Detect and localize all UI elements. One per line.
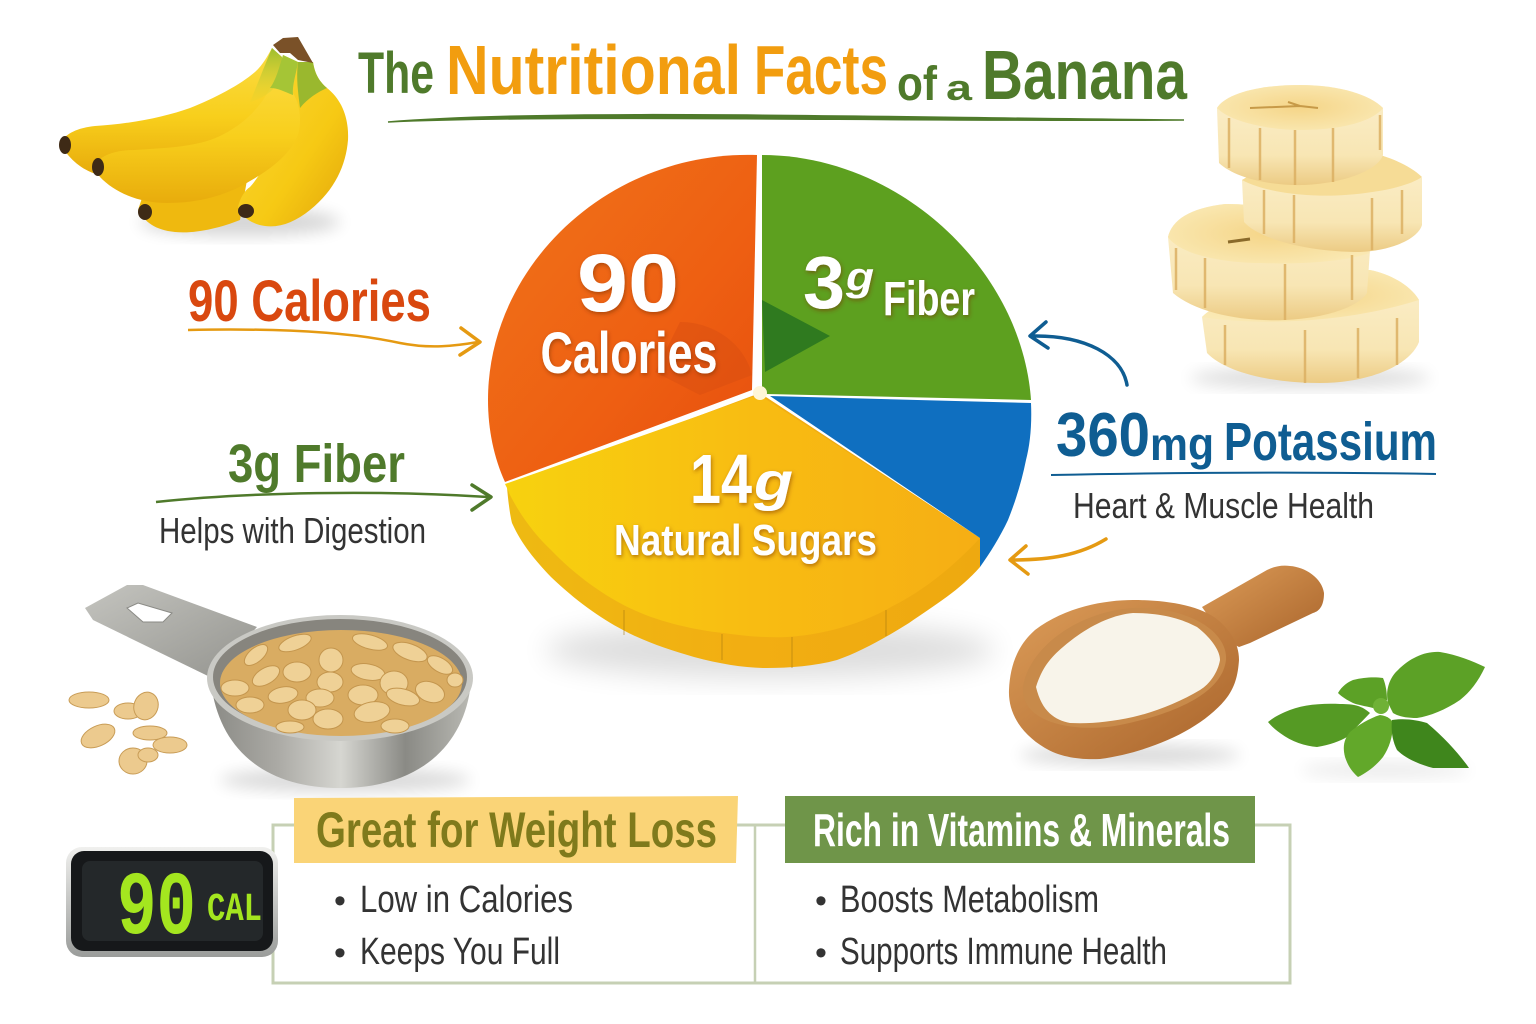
heading: great for weight loss <box>294 796 738 863</box>
chart label: 90 calories: Calories <box>540 321 718 386</box>
chart slice: yellow natural sugars <box>505 393 980 668</box>
heading: rich in vitamins and minerals <box>785 796 1255 863</box>
panel: benefits box <box>273 796 1290 983</box>
chart label: 3g fiber: g <box>845 255 874 299</box>
arrow: to fiber slice <box>1030 322 1127 385</box>
callout: 3g fiber: 3g Fiber <box>228 434 405 494</box>
icon: measuring cup of oats <box>69 585 473 792</box>
pie chart <box>488 155 1031 678</box>
title: of <box>897 58 938 111</box>
chart label: 14g natural sugars <box>614 440 877 565</box>
arrow: to blue slice <box>1010 539 1106 574</box>
heading: rich in vitamins and minerals: Rich in Vitamins & Minerals <box>813 804 1230 856</box>
chart label: 3g fiber: 3 <box>803 241 845 324</box>
callout: 360mg potassium: 360 <box>1056 401 1150 470</box>
text block: weight loss bullets: Keeps You Full <box>360 931 560 973</box>
heading: great for weight loss: Great for Weight Loss <box>316 802 717 858</box>
chart label: 3g fiber <box>803 241 975 326</box>
text block: weight loss bullets: • <box>334 882 346 920</box>
chart slice: orange calories <box>488 155 757 482</box>
icon: green leaves <box>1268 652 1485 778</box>
chart slice: blue potassium <box>770 396 1031 567</box>
title <box>358 31 1188 122</box>
icon: banana bunch <box>59 37 348 236</box>
title: Banana <box>982 36 1188 114</box>
arrow: to sugars slice <box>472 485 491 510</box>
icon: stacked banana slices <box>1168 85 1430 388</box>
chart label: 3g fiber: Fiber <box>883 273 975 326</box>
text block: vitamins bullets: • <box>815 882 827 920</box>
text block: vitamins bullets: Boosts Metabolism <box>840 879 1099 921</box>
icon: digital scale display: CAL <box>207 888 262 933</box>
chart label: 14g natural sugars: Natural Sugars <box>614 516 877 565</box>
callout: 3g fiber: Helps with Digestion <box>159 510 426 551</box>
callout: 90 calories: 90 Calories <box>188 269 431 334</box>
callout: 360mg potassium <box>1010 322 1437 574</box>
callout: 360mg potassium: Heart & Muscle Health <box>1073 485 1374 526</box>
chart label: 14g natural sugars: 14 <box>690 440 752 518</box>
title: The <box>358 41 434 106</box>
text block: vitamins bullets: • <box>815 934 827 972</box>
title: a <box>946 67 973 108</box>
arrow: to calories slice <box>460 328 480 355</box>
icon: wooden spoon of sugar <box>1009 566 1324 765</box>
text block: weight loss bullets: • <box>334 934 346 972</box>
icon: digital scale display: 90 <box>117 859 196 961</box>
chart slice: green fiber <box>762 155 1031 400</box>
chart label: 14g natural sugars: g <box>753 452 793 512</box>
chart label: 90 calories: 90 <box>577 238 679 329</box>
callout: 360mg potassium: mg <box>1150 418 1214 470</box>
text block: weight loss bullets <box>334 879 573 973</box>
text block: vitamins bullets: Supports Immune Health <box>840 931 1167 973</box>
icon: digital scale display <box>66 847 278 961</box>
chart label: 90 calories <box>540 238 718 386</box>
title: Nutritional <box>446 31 741 109</box>
text block: weight loss bullets: Low in Calories <box>360 879 573 921</box>
title: Facts <box>754 31 888 109</box>
callout: 360mg potassium: Potassium <box>1224 412 1437 472</box>
callout: 3g fiber <box>156 434 491 551</box>
text block: vitamins bullets <box>815 879 1167 973</box>
